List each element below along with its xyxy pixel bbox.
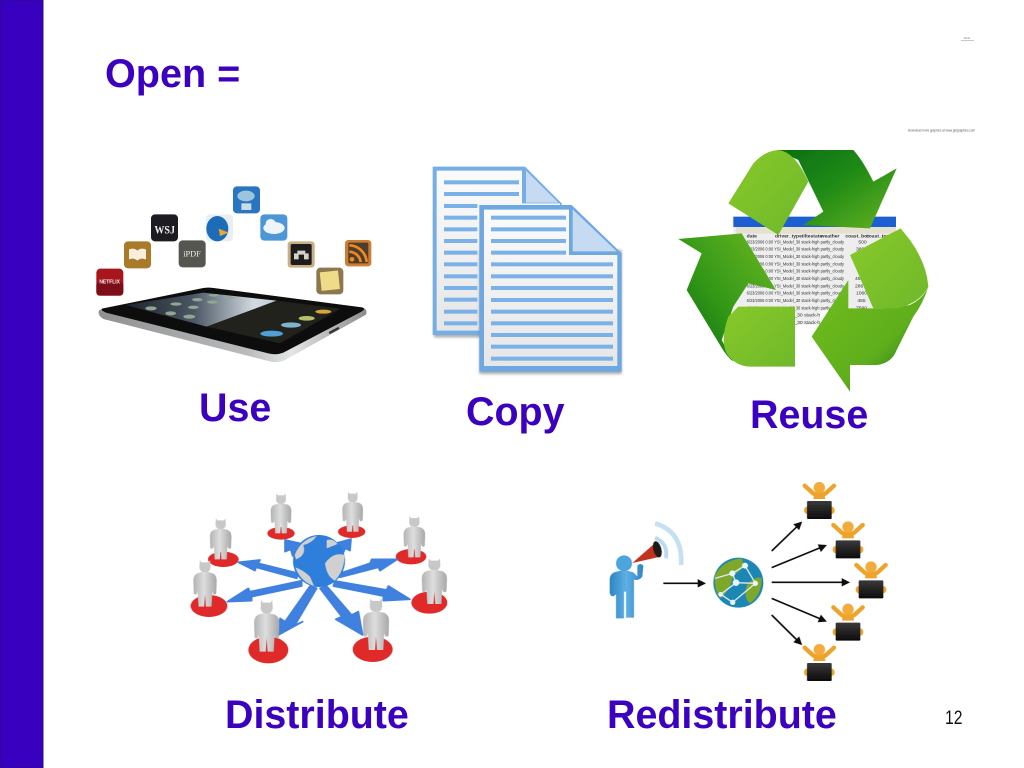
left arrow: [678, 233, 795, 367]
right arrow: [812, 228, 928, 392]
spreadsheet: 6/23/2006 0:00 YSI_Model_30 stack-high partly_cloudy: [747, 247, 844, 253]
globe: [293, 535, 345, 587]
spreadsheet: 6/23/2006 0:00 YSI_Model_30 stack-high partly_cloudy: [747, 269, 844, 275]
title: Open =: [105, 52, 240, 96]
sound waves: [655, 523, 681, 565]
spreadsheet: driver_type: [775, 233, 802, 239]
page number: 12: [945, 708, 962, 729]
blue speaker: [610, 555, 643, 618]
watermark: Download more graphics at www.pptgraphics.com: [908, 128, 975, 132]
spreadsheet: 6/23/2006 0:00 YSI_Model_30 stack-high partly_cloudy: [747, 254, 844, 260]
icon: tablet with apps: [96, 186, 371, 362]
label: Redistribute: Redistribute: [607, 693, 837, 737]
spreadsheet: 6/23/2006 0:00 YSI_Model_30 stack-high partly_cloudy: [747, 283, 844, 289]
icon: globe distributing to people: [191, 492, 447, 663]
people: [193, 492, 447, 652]
spreadsheet: 6/23/2006 0:00 YSI_Model_30 stack-high partly_cloudy: [747, 298, 844, 304]
front document: [479, 205, 622, 372]
app icons: WSJ: [154, 223, 175, 237]
megaphone: [632, 540, 663, 563]
icon: two documents: [433, 167, 622, 374]
watermark top: [961, 36, 974, 41]
back document: [433, 167, 562, 335]
spreadsheet: 453: [855, 276, 864, 282]
spreadsheet: 380: [856, 247, 865, 253]
icon: recycle symbol over spreadsheet: [678, 150, 928, 392]
app icons: NETFLIX: [99, 280, 120, 286]
arrows: [663, 523, 848, 644]
spreadsheet: 6/23/2006 0:00 YSI_Model_30 stack-high partly_cloudy: [747, 261, 844, 267]
app icons: iPDF: [183, 250, 201, 259]
spreadsheet: coast_top: [866, 233, 890, 239]
red discs: [191, 525, 447, 663]
app icons: [96, 186, 371, 296]
back document shadow: [434, 323, 483, 337]
spreadsheet: date: [747, 233, 757, 239]
spreadsheet: 286: [855, 283, 864, 289]
spreadsheet: 455: [857, 298, 866, 304]
label: Distribute: Distribute: [225, 693, 409, 737]
label: Reuse: Reuse: [750, 393, 868, 437]
spreadsheet: weather: [820, 233, 840, 239]
spreadsheet: 6/23/2006 0:00 YSI_Model_30 stack-high partly_cloudy: [747, 305, 844, 311]
label: Copy: Copy: [466, 390, 565, 434]
spreadsheet: 6/23/2006 0:00 YSI_Model_30 stack-high partly_cloudy: [747, 291, 844, 297]
network globe: [713, 558, 763, 608]
spreadsheet: 6/23/2006 0:00 YSI_Model_30 stack-high partly_cloudy: [747, 276, 844, 282]
tablet: [99, 288, 367, 362]
spreadsheet: YSI_Model_30 stack-high: [770, 320, 827, 326]
spreadsheet: 6/23/2006 0:00 YSI_Model_30 stack-high partly_cloudy: [747, 239, 844, 245]
spreadsheet: 500: [858, 239, 867, 245]
spreadsheet: 1060: [856, 291, 867, 297]
top arrow: [728, 150, 897, 235]
label: Use: Use: [199, 386, 271, 430]
spreadsheet: YSI_Model_30 stack-high: [770, 313, 827, 319]
watermark top: Slide: [964, 36, 971, 40]
blue arrows: [227, 539, 410, 635]
left sidebar: [0, 0, 43, 768]
spreadsheet: 7590: [856, 305, 867, 311]
icon: speaker to globe to audience: [610, 482, 886, 681]
spreadsheet: coast_bot: [845, 233, 869, 239]
spreadsheet: [733, 217, 896, 326]
front document shadow: [479, 250, 622, 374]
spreadsheet: tiltestate: [802, 233, 822, 239]
audience: [804, 482, 886, 681]
